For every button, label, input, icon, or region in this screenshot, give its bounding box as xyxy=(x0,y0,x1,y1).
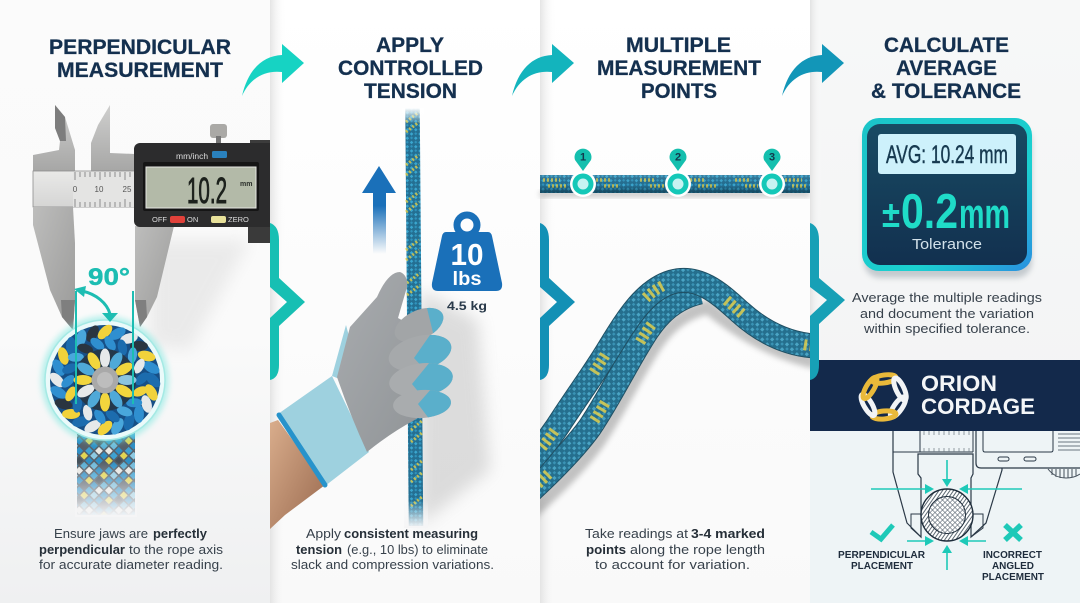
marker 1 xyxy=(570,149,596,197)
arrow: upward pull xyxy=(362,166,396,254)
icon: 10 lbs weight: lbs xyxy=(452,269,482,290)
brace connector xyxy=(810,223,845,380)
heading: multiple measurement points xyxy=(597,34,761,103)
caption: step 2 xyxy=(291,526,494,572)
caliper: ZERO xyxy=(228,215,249,224)
marker 2 xyxy=(665,149,691,197)
glove palm xyxy=(337,272,430,452)
caption: step 3: along the rope length xyxy=(630,542,765,557)
forearm xyxy=(270,420,325,529)
finger 3 xyxy=(390,363,453,395)
tolerance value: ± xyxy=(882,194,900,235)
caliper: ON xyxy=(187,215,198,224)
finger 2 xyxy=(389,334,452,370)
tolerance value xyxy=(882,185,1010,239)
heading: calculate average and tolerance xyxy=(871,34,1021,103)
panel: multiple measurement points xyxy=(515,0,815,603)
caption: step 1: perfectly xyxy=(153,526,208,541)
glove cuff xyxy=(278,325,369,486)
caption: step 1: perpendicular xyxy=(39,542,125,557)
heading: apply controlled tension: APPLY xyxy=(376,34,444,57)
caliper: mm xyxy=(240,181,252,188)
heading: perpendicular measurement: PERPENDICULAR xyxy=(49,36,231,59)
arrow: step 2 to 3 xyxy=(512,44,574,96)
rope cross-section xyxy=(41,316,169,444)
gloved hand xyxy=(270,272,460,529)
caption: step 2: Apply xyxy=(306,526,342,541)
caption: step 1 xyxy=(39,526,224,572)
alignment arrows xyxy=(871,460,1022,570)
caption: step 3: points xyxy=(586,542,626,557)
heading: calculate average and tolerance: AVERAGE xyxy=(896,57,997,80)
label: incorrect angled placement: PLACEMENT xyxy=(982,571,1045,583)
curved rope xyxy=(515,280,815,520)
label: perpendicular placement: PLACEMENT xyxy=(851,560,914,572)
caption: step 4: Average the multiple readings xyxy=(852,290,1043,305)
panel: calculate average and tolerance xyxy=(810,0,1080,603)
arrow: step 3 to 4 xyxy=(782,44,844,96)
rope below cross-section xyxy=(75,430,137,517)
brand band: orion cordage: CORDAGE xyxy=(921,394,1035,419)
caption: step 3 xyxy=(585,526,765,572)
caliper: mm/inch xyxy=(176,151,208,161)
brand band: orion cordage xyxy=(810,360,1080,431)
caliper: 25 xyxy=(123,185,132,194)
straight rope xyxy=(540,175,810,197)
heading: multiple measurement points: MEASUREMENT xyxy=(597,57,761,80)
vertical rope xyxy=(402,108,428,528)
brand band: orion cordage: ORION xyxy=(921,371,997,396)
brace connector xyxy=(270,223,305,380)
caption: step 4 xyxy=(852,290,1043,336)
caption: step 3: to account for variation. xyxy=(595,557,750,572)
caption: step 1: for accurate diameter reading. xyxy=(39,557,223,572)
90 degree angle marker xyxy=(74,264,133,404)
marker 2: 2 xyxy=(675,152,681,164)
label: perpendicular placement xyxy=(838,549,925,572)
caption: step 4: and document the variation xyxy=(860,306,1034,321)
icon: 10 lbs weight: 10 xyxy=(450,237,484,272)
tolerance value: mm xyxy=(959,190,1010,237)
caliper: 10 xyxy=(95,185,104,194)
logo xyxy=(859,373,909,420)
label: incorrect angled placement: INCORRECT xyxy=(983,549,1043,561)
brace connector xyxy=(540,223,575,380)
tolerance value: 0.2 xyxy=(901,185,958,239)
heading: calculate average and tolerance: & TOLERANCE xyxy=(871,80,1021,103)
heading: calculate average and tolerance: CALCULATE xyxy=(884,34,1009,57)
icon: 10 lbs weight xyxy=(432,215,502,313)
caption: step 2: (e.g., 10 lbs) to eliminate xyxy=(347,542,488,557)
panel: perpendicular measurement xyxy=(0,0,276,603)
panel: apply controlled tension xyxy=(270,0,502,603)
heading: perpendicular measurement: MEASUREMENT xyxy=(57,59,223,82)
marker 1: 1 xyxy=(580,152,586,164)
caption: step 3: 3-4 marked xyxy=(691,526,765,541)
caliper: 0 xyxy=(73,185,78,194)
average value box: AVG: 10.24 mm xyxy=(886,141,1008,169)
caption: step 1: Ensure jaws are xyxy=(54,526,148,541)
caption: step 2: slack and compression variations. xyxy=(291,557,494,572)
label: incorrect angled placement: ANGLED xyxy=(992,560,1034,572)
caption: step 2: tension xyxy=(296,542,342,557)
caliper xyxy=(33,105,276,350)
schematic caliper xyxy=(893,431,1080,537)
90 degree angle marker: 90° xyxy=(88,264,130,291)
caption: step 2: consistent measuring xyxy=(344,526,478,541)
marker 3 xyxy=(759,149,785,197)
heading: apply controlled tension: TENSION xyxy=(364,80,457,103)
heading: perpendicular measurement xyxy=(49,36,231,82)
label: incorrect angled placement xyxy=(982,549,1045,583)
finger 1 xyxy=(401,308,444,338)
caption: step 3: Take readings at xyxy=(585,526,688,541)
marker 3: 3 xyxy=(769,152,775,164)
tolerance readout card: Tolerance xyxy=(912,237,982,253)
average value box xyxy=(878,134,1016,174)
icon: cross mark xyxy=(1005,525,1021,540)
caliper: OFF xyxy=(152,215,167,224)
label: perpendicular placement: PERPENDICULAR xyxy=(838,549,925,561)
caption: step 4: within specified tolerance. xyxy=(863,321,1030,336)
tolerance readout card xyxy=(862,118,1032,278)
icon: check mark xyxy=(871,525,893,539)
caliper: 10.2 xyxy=(187,170,227,211)
heading: apply controlled tension xyxy=(338,34,483,103)
caption: step 1: to the rope axis xyxy=(129,542,224,557)
arrow: step 1 to 2 xyxy=(242,44,304,96)
schematic rope section xyxy=(921,489,973,541)
panel: placement schematic xyxy=(810,431,1080,603)
heading: apply controlled tension: CONTROLLED xyxy=(338,57,483,80)
finger 4 xyxy=(393,390,451,418)
icon: 10 lbs weight: 4.5 kg xyxy=(447,299,487,313)
heading: multiple measurement points: MULTIPLE xyxy=(626,34,731,57)
heading: multiple measurement points: POINTS xyxy=(641,80,717,103)
